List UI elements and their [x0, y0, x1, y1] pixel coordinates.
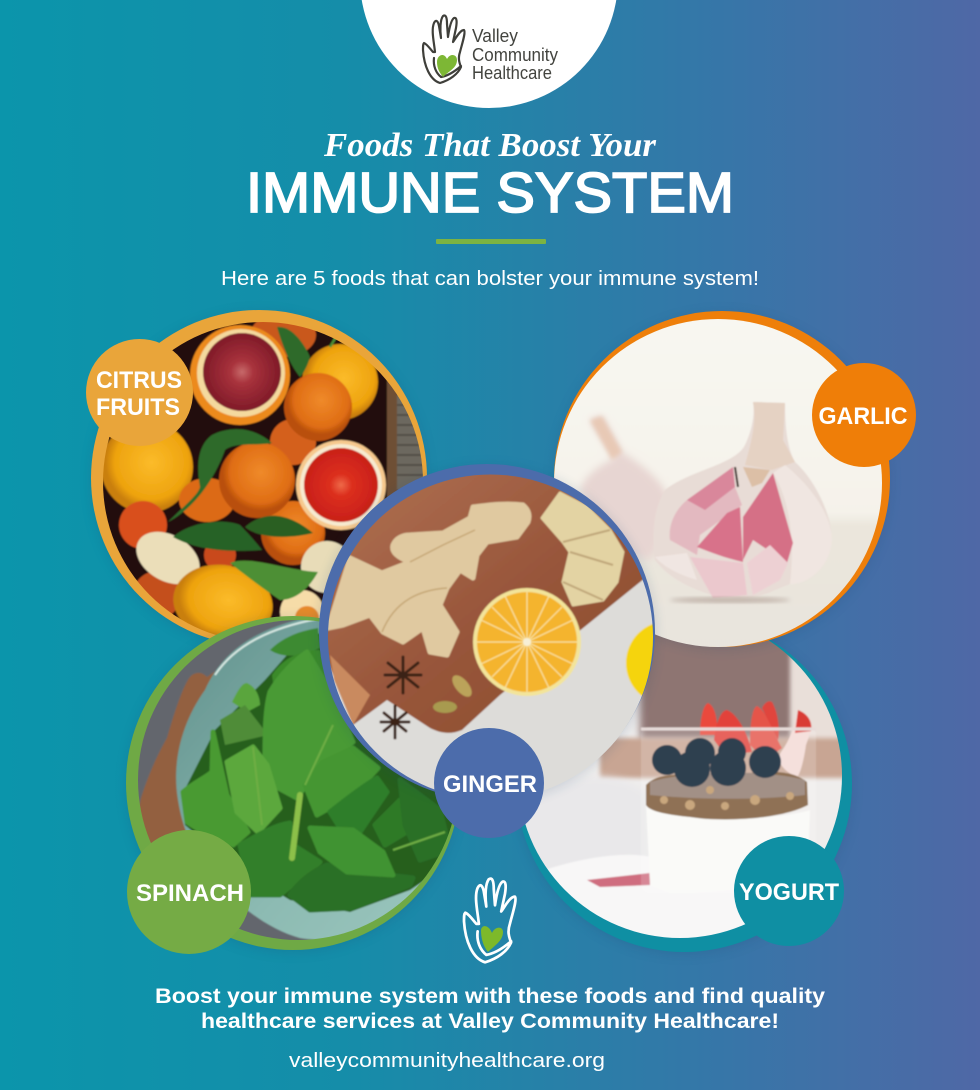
- panel: spinach: [125, 610, 470, 955]
- logo wordmark: [472, 26, 558, 83]
- panel: yogurt: [522, 634, 852, 952]
- closing message: Boost your immune system with these foods and find quality: [155, 985, 825, 1008]
- logo badge: [360, 0, 618, 108]
- closing message: [155, 985, 825, 1033]
- logo wordmark: Healthcare: [472, 63, 552, 83]
- badge: citrus fruits: [86, 339, 193, 446]
- badge: garlic: GARLIC: [818, 403, 908, 430]
- title: IMMUNE SYSTEM: [246, 161, 734, 225]
- badge: ginger: [434, 728, 544, 838]
- badge: ginger: GINGER: [443, 771, 537, 798]
- badge: spinach: SPINACH: [136, 880, 244, 907]
- badge: spinach: [127, 830, 251, 954]
- subtitle: Here are 5 foods that can bolster your immune system!: [221, 268, 759, 290]
- logo wordmark: Valley: [472, 26, 518, 46]
- panel: garlic: [550, 311, 890, 655]
- badge: yogurt: [734, 836, 844, 946]
- logo wordmark: Community: [472, 45, 558, 65]
- title: Foods That Boost Your: [323, 127, 657, 164]
- website url: valleycommunityhealthcare.org: [289, 1050, 605, 1072]
- title: [246, 127, 734, 225]
- closing message: healthcare services at Valley Community Healthcare!: [201, 1010, 779, 1033]
- icon: hand with heart: [423, 15, 465, 83]
- badge: yogurt: YOGURT: [739, 879, 839, 906]
- badge: citrus fruits: CITRUS: [96, 367, 182, 394]
- panel: citrus fruits: [90, 310, 440, 660]
- badge: citrus fruits: FRUITS: [96, 394, 180, 421]
- badge: garlic: [812, 363, 916, 467]
- panel: ginger: [315, 464, 660, 798]
- icon: white hand with heart: [464, 879, 516, 962]
